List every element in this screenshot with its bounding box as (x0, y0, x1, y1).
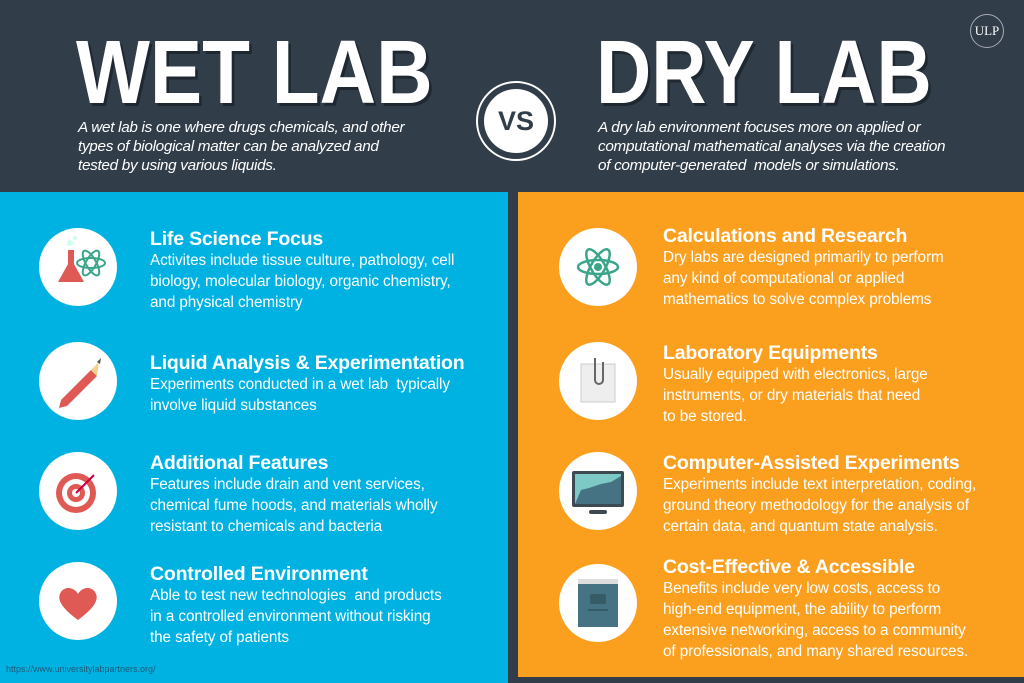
item: cost-effective (663, 556, 968, 660)
vs badge: VS (498, 106, 534, 136)
icon: atom (559, 228, 637, 306)
item: life science: and physical chemistry (150, 294, 303, 311)
item: additional features: Features include drain and vent services, (150, 476, 425, 493)
title: dry lab: DRY LAB (596, 23, 932, 123)
item: life science: Activites include tissue culture, pathology, cell (150, 252, 454, 269)
item: additional features (150, 452, 438, 535)
item: cost-effective: extensive networking, access to a community (663, 622, 966, 639)
item: calculations: Dry labs are designed primarily to perform (663, 249, 944, 266)
icon: flask atom (39, 228, 117, 306)
item: additional features: chemical fume hoods, and materials wholly (150, 497, 438, 514)
item: liquid analysis: Experiments conducted in a wet lab typically (150, 376, 450, 393)
panel: wet lab (0, 192, 508, 683)
intro: dry lab: of computer-generated models or simulations. (598, 157, 899, 174)
icon: book (559, 564, 637, 642)
intro: wet lab: A wet lab is one where drugs chemicals, and other (78, 119, 404, 136)
item: liquid analysis: involve liquid substances (150, 397, 317, 414)
item: equipment: Laboratory Equipments (663, 342, 878, 364)
item: equipment: to be stored. (663, 408, 747, 425)
item: liquid analysis: Liquid Analysis & Experimentation (150, 352, 464, 374)
intro: dry lab (597, 119, 945, 174)
intro: dry lab: A dry lab environment focuses more on applied or (598, 119, 920, 136)
icon: paper clip (559, 342, 637, 420)
item: controlled environment (150, 563, 442, 646)
item: controlled environment: in a controlled environment without risking (150, 608, 431, 625)
item: cost-effective: high-end equipment, the ability to perform (663, 601, 941, 618)
item: equipment (663, 342, 928, 425)
item: controlled environment: Able to test new technologies and products (150, 587, 442, 604)
logo (970, 14, 1004, 48)
item: computer-assisted: Experiments include text interpretation, coding, (663, 476, 976, 493)
item: equipment: instruments, or dry materials that need (663, 387, 920, 404)
item: controlled environment: the safety of patients (150, 629, 289, 646)
item: equipment: Usually equipped with electronics, large (663, 366, 928, 383)
item: liquid analysis (150, 352, 464, 414)
header (0, 0, 1024, 190)
item: cost-effective: Cost-Effective & Accessible (663, 556, 915, 578)
item: calculations: Calculations and Research (663, 225, 907, 247)
item: life science: biology, molecular biology, organic chemistry, (150, 273, 451, 290)
item: additional features: resistant to chemicals and bacteria (150, 518, 382, 535)
item: additional features: Additional Features (150, 452, 328, 474)
vs badge (476, 81, 556, 161)
item: calculations: any kind of computational or applied (663, 270, 904, 287)
item: computer-assisted: certain data, and quantum state analysis. (663, 518, 938, 535)
intro: wet lab: tested by using various liquids. (78, 157, 277, 174)
item: calculations: mathematics to solve complex problems (663, 291, 931, 308)
icon: pencil (39, 342, 117, 420)
item: computer-assisted: Computer-Assisted Experiments (663, 452, 960, 474)
icon: target (39, 452, 117, 530)
item: computer-assisted (663, 452, 976, 535)
title: wet lab: WET LAB (76, 23, 433, 123)
item: controlled environment: Controlled Environment (150, 563, 368, 585)
intro: wet lab (77, 119, 406, 174)
item: computer-assisted: ground theory methodology for the analysis of (663, 497, 969, 514)
logo: ULP (975, 23, 999, 38)
source url: https://www.universitylabpartners.org/ (6, 664, 156, 674)
item: cost-effective: of professionals, and many shared resources. (663, 643, 968, 660)
panel: dry lab (518, 192, 1024, 677)
item: calculations (663, 225, 944, 308)
item: life science (150, 228, 454, 311)
icon: heart (39, 562, 117, 640)
item: life science: Life Science Focus (150, 228, 323, 250)
intro: wet lab: types of biological matter can be analyzed and (78, 138, 379, 155)
icon: monitor (559, 452, 637, 530)
intro: dry lab: computational mathematical analyses via the creation (598, 138, 945, 155)
item: cost-effective: Benefits include very low costs, access to (663, 580, 940, 597)
